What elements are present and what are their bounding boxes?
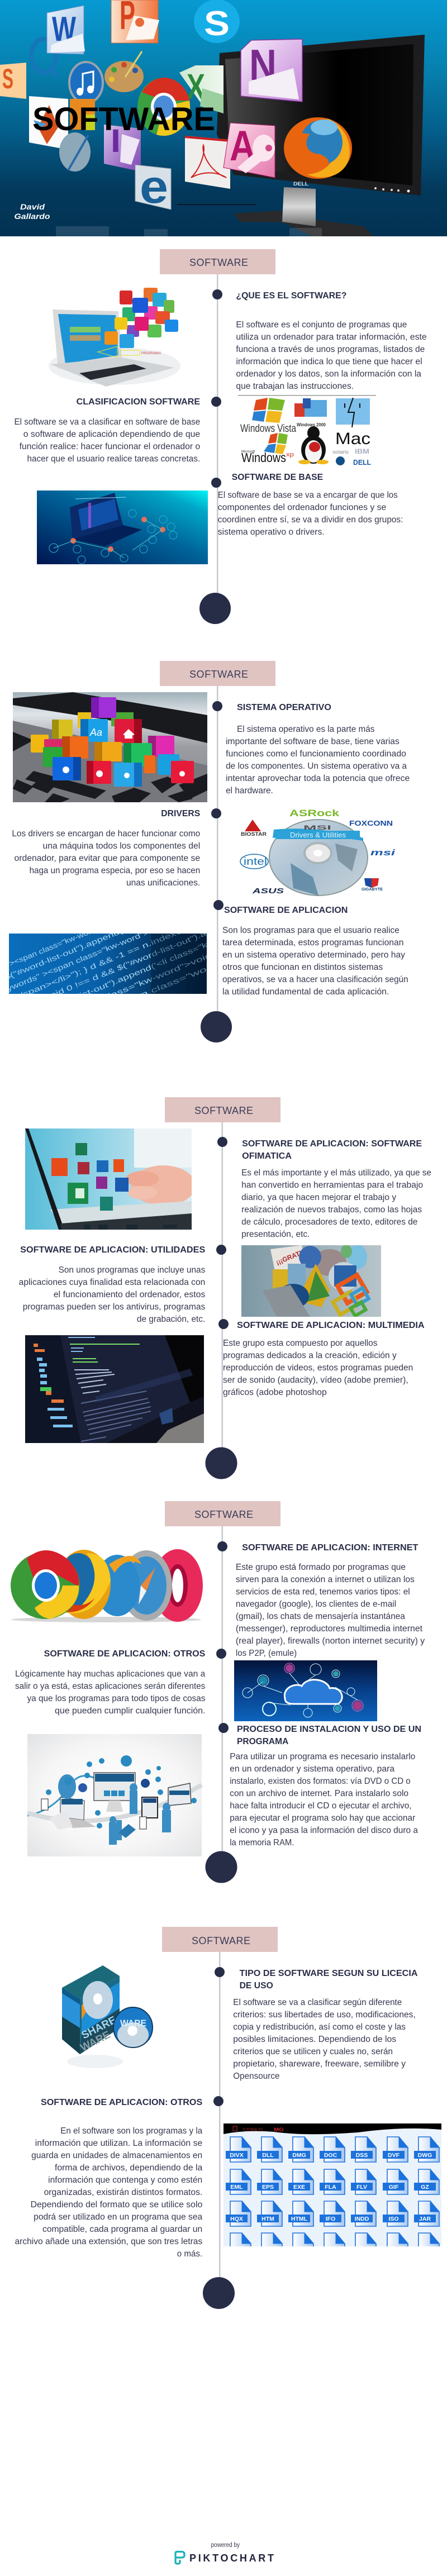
text block: software ofimatica: han convertido en herramientas para el trabajo bbox=[241, 1180, 423, 1190]
text block: software de aplicacion: operativos, se va a hacer una clasificación según bbox=[222, 975, 408, 984]
image: file format icons: DLL bbox=[262, 2152, 274, 2159]
heading: software de base: SOFTWARE DE BASE bbox=[232, 473, 323, 482]
icon: word: W bbox=[52, 10, 76, 49]
heading: software ofimatica: OFIMATICA bbox=[242, 1151, 292, 1161]
dot bbox=[212, 701, 222, 711]
icon: access bbox=[224, 122, 275, 178]
author name: Gallardo bbox=[15, 212, 50, 221]
panel: section 2 bbox=[0, 661, 410, 1049]
icon: infopath bbox=[104, 123, 141, 172]
text block: internet bbox=[236, 1563, 425, 1658]
icon: itunes bbox=[69, 62, 103, 103]
title: SOFTWARE bbox=[32, 101, 215, 137]
image: file format icons: HTM bbox=[261, 2216, 274, 2222]
image: drivers cd and brand logos: ASUS bbox=[251, 887, 284, 895]
image: operating system logos: IBM bbox=[355, 447, 369, 455]
heading: que es el software: ¿QUE ES EL SOFTWARE? bbox=[236, 291, 346, 301]
text block: que es el software bbox=[236, 320, 427, 391]
text block: proceso de instalacion: en un ordenador y sistema operativo, para bbox=[230, 1764, 394, 1774]
panel: header banner bbox=[0, 0, 447, 236]
dot bbox=[218, 1319, 229, 1329]
text block: software de base: El software de base se va a encargar de que los bbox=[218, 491, 398, 500]
text block: otros archivos: podrá ser utilizado en un programa que sea bbox=[34, 2212, 203, 2222]
icon: onenote bbox=[241, 39, 302, 102]
dot bbox=[213, 900, 224, 910]
image: drivers cd and brand logos: GIGABYTE bbox=[362, 888, 383, 892]
image: operating system logos: Windows bbox=[241, 450, 286, 465]
panel: section 1 bbox=[15, 249, 427, 624]
text block: sistema operativo: intentar aprovechar toda la potencia que ofrece bbox=[226, 774, 410, 783]
text block: proceso de instalacion: para ejecutar el programa solo hay que accionar bbox=[230, 1813, 415, 1823]
image: drivers cd and brand logos: msi bbox=[370, 848, 396, 858]
text block: otros archivos: guarda en unidades de almacenamientos en bbox=[31, 2151, 202, 2160]
image: file format icons: FLV bbox=[356, 2184, 367, 2191]
text block: sistema operativo: importante del software de base, tiene varias bbox=[226, 737, 400, 746]
section heading box bbox=[160, 661, 275, 686]
section heading box bbox=[165, 1501, 280, 1526]
text block: internet: navegador (google), los clientes de e-mail bbox=[236, 1599, 396, 1609]
text block: utilidades: Son unos programas que incluye unas bbox=[59, 1265, 206, 1275]
icon: quicktime bbox=[31, 39, 57, 75]
dot bbox=[212, 289, 222, 299]
image: web browser logos bbox=[11, 1549, 203, 1622]
text block: clasificacion: función realice: hacer funcionar el ordenador o bbox=[20, 442, 200, 451]
text block: software de base: componentes del ordenador funciones y se bbox=[218, 503, 386, 512]
text block: sistema operativo: El sistema operativo es la parte más bbox=[237, 725, 375, 734]
text block: software de base bbox=[218, 491, 403, 537]
dot bbox=[215, 1967, 225, 1977]
author name bbox=[15, 202, 50, 221]
text block: internet: los P2P, (emule) bbox=[236, 1649, 297, 1658]
heading: tipo de software bbox=[240, 1969, 418, 1991]
text block: internet: Este grupo está formado por programas que bbox=[236, 1563, 406, 1572]
icon: powerpoint bbox=[111, 0, 159, 43]
icon: small tiles bbox=[70, 99, 95, 130]
section heading box bbox=[165, 1097, 280, 1122]
heading: proceso de instalacion: PROGRAMA bbox=[237, 1737, 288, 1746]
text block: proceso de instalacion: con un archivo de internet. Para instalarlo solo bbox=[230, 1789, 408, 1798]
text block: otros: ya que los programas para todo tipos de cosas bbox=[27, 1694, 206, 1703]
image: file format icons: DMG bbox=[292, 2152, 306, 2159]
text block: software ofimatica bbox=[241, 1168, 431, 1239]
image: multimedia software collage: ¡¡¡GRATIS!!! bbox=[275, 1245, 313, 1266]
footer: powered by piktochart: powered by bbox=[211, 2542, 240, 2549]
heading: proceso de instalacion: PROCESO DE INSTALACION Y USO DE UN bbox=[237, 1725, 421, 1734]
heading: internet: SOFTWARE DE APLICACION: INTERNET bbox=[242, 1543, 419, 1553]
icon: sway: S bbox=[2, 63, 13, 94]
text block: clasificacion: hacer que el usuario realice tareas concretas. bbox=[27, 454, 200, 464]
image: file format icons: DVF bbox=[388, 2152, 400, 2159]
text block: multimedia: ser de sonido (audacity), vídeo (adobe premier), bbox=[223, 1375, 408, 1385]
image: drivers cd and brand logos: Drivers & Utilities bbox=[290, 831, 346, 839]
large end dot bbox=[199, 593, 231, 624]
text block: software de base: sistema operativo o drivers. bbox=[218, 527, 325, 537]
icon: infopath: I bbox=[111, 123, 121, 159]
image: shareware box: WARE bbox=[120, 2018, 146, 2029]
text block: drivers: Los drivers se encargan de hacer funcionar como bbox=[12, 829, 200, 839]
text block: internet: servicios de esta red, tenemos varios tipos: el bbox=[236, 1587, 410, 1597]
image: file format icons: DSS bbox=[356, 2152, 368, 2159]
text block: otros archivos: En el software son los programas y la bbox=[60, 2126, 203, 2136]
author name: David bbox=[20, 202, 45, 211]
text block: tipo de software: Opensource bbox=[233, 2072, 279, 2081]
text block: otros: salir o ya está, estas aplicaciones serán diferentes bbox=[15, 1682, 206, 1691]
image: operating system logos: Mac bbox=[335, 430, 370, 448]
text block: software de aplicacion: otros que funcionan en distintos sistemas bbox=[222, 963, 383, 972]
image: file format icons: INDD bbox=[355, 2216, 369, 2222]
image: operating system logos: Microsoft bbox=[241, 450, 255, 454]
image: file format icons: TUTORIALES bbox=[242, 2127, 263, 2132]
image: app cubes on keyboard bbox=[13, 692, 207, 802]
text block: otros archivos: forma de archivos, dependiendo de la bbox=[55, 2163, 203, 2173]
icon: firefox bbox=[284, 117, 352, 179]
text block: otros: Lógicamente hay muchas aplicaciones que van a bbox=[15, 1669, 206, 1679]
large end dot bbox=[206, 1851, 237, 1883]
icon: chrome bbox=[137, 78, 190, 136]
text block: multimedia: reproducción de videos, estos programas pueden bbox=[223, 1363, 413, 1373]
text block: sistema operativo bbox=[226, 725, 410, 796]
text block: otros archivos: archivo añade una extensión, que son tres letras bbox=[15, 2237, 202, 2246]
text block: tipo de software: propietario, shareware, freeware, semilibre y bbox=[233, 2059, 406, 2069]
text block: drivers: una máquina todos los componentes del bbox=[42, 841, 200, 851]
text block: tipo de software: copia y redistribución, así como el coste y las bbox=[233, 2022, 406, 2032]
icon: desktop monitor bbox=[217, 35, 425, 236]
image: file format icons: EML bbox=[230, 2184, 243, 2191]
footer: powered by piktochart bbox=[175, 2542, 274, 2564]
heading: software ofimatica: SOFTWARE DE APLICACION: SOFTWARE bbox=[242, 1139, 422, 1149]
text block: software de aplicacion bbox=[222, 926, 408, 997]
image: file format icons: DIVX bbox=[230, 2152, 244, 2159]
text block: proceso de instalacion bbox=[230, 1752, 418, 1848]
text block: drivers: unas unificaciones. bbox=[126, 878, 200, 888]
image: operating system logos: solaris bbox=[332, 449, 349, 455]
text block: proceso de instalacion: hace falta introducir el CD o ejecutar el archivo, bbox=[230, 1801, 412, 1811]
text block: internet: (gmail), los chats de mensajería instantánea bbox=[236, 1612, 405, 1621]
heading: clasificacion: CLASIFICACION SOFTWARE bbox=[77, 397, 200, 407]
image: operating system logos: Windows Vista bbox=[240, 423, 296, 435]
text block: multimedia: gráficos (adobe photoshop bbox=[223, 1388, 327, 1397]
text block: otros archivos: organizadas, existirán distintos formatos. bbox=[44, 2188, 202, 2197]
text block: internet: (real player), firewalls (norton internet security) y bbox=[236, 1636, 425, 1646]
image: drivers cd and brand logos: ASRock bbox=[289, 808, 340, 818]
heading: multimedia: SOFTWARE DE APLICACION: MULTIMEDIA bbox=[237, 1321, 425, 1330]
text block: otros archivos bbox=[15, 2126, 203, 2259]
dot bbox=[217, 1137, 227, 1147]
image: shareware box: SHARE bbox=[80, 2015, 118, 2041]
image: file format icons: GZ bbox=[421, 2184, 429, 2191]
image: drivers cd and brand logos: FOXCONN bbox=[349, 819, 393, 827]
large end dot bbox=[203, 2277, 235, 2309]
dot bbox=[213, 2096, 224, 2106]
text block: drivers: haga un programa especia, por eso se hacen bbox=[30, 866, 200, 875]
text block: otros bbox=[15, 1669, 206, 1716]
panel: section 5 bbox=[15, 1927, 441, 2309]
text block: que es el software: El software es el conjunto de programas que bbox=[236, 320, 407, 330]
image: operating system logos: Windows 2000 bbox=[297, 422, 326, 427]
image: file format icons: GIF bbox=[389, 2184, 399, 2191]
text block: sistema operativo: funciones como el funcionamiento coordinado bbox=[226, 749, 406, 759]
text block: internet: sirven para la conexión a internet o utilizan los bbox=[236, 1575, 415, 1584]
image: operating system logos: xp bbox=[286, 451, 294, 458]
image: office apps over laptop bbox=[25, 1129, 196, 1230]
icon: excel: X bbox=[187, 66, 205, 107]
text block: tipo de software: criterios que se utilicen y cuales no, serán bbox=[233, 2047, 393, 2056]
text block: tipo de software: El software se va a clasificar según diferente bbox=[233, 1998, 402, 2007]
image: blue code screen: d,c ? $("#word-list-out").append('<li class="kw-word" bbox=[8, 926, 245, 1028]
underline stroke bbox=[177, 204, 256, 205]
faded reflections bbox=[56, 226, 322, 236]
text block: drivers: ordenador, para evitar que para componente se bbox=[15, 854, 200, 863]
image: file format icons: HQX bbox=[230, 2216, 243, 2222]
dot bbox=[218, 1723, 229, 1733]
text block: sistema operativo: de los componentes. Un sistema operativo va a bbox=[226, 761, 407, 771]
section heading box: SOFTWARE bbox=[189, 257, 248, 268]
icon: sway bbox=[0, 63, 26, 99]
text block: utilidades: de grabación, etc. bbox=[137, 1315, 205, 1324]
text block: otros archivos: o más. bbox=[177, 2249, 202, 2259]
panel: section 4 bbox=[11, 1501, 425, 1883]
image: shareware box bbox=[62, 1965, 153, 2068]
image: drivers cd and brand logos bbox=[240, 808, 396, 896]
image: blue code screen: keyword" ><span class="kw-word">void 0, g++); bbox=[13, 934, 254, 1038]
icon: excel bbox=[179, 65, 224, 113]
heading: software de aplicacion: SOFTWARE DE APLICACION bbox=[224, 906, 348, 915]
image: blue code screen: + "</span></li>"); } d && -1 == n.indexOf(d.b) && bbox=[0, 910, 226, 1007]
heading: utilidades: SOFTWARE DE APLICACION: UTILIDADES bbox=[20, 1245, 205, 1255]
section heading box: SOFTWARE bbox=[194, 1509, 253, 1520]
dot bbox=[211, 397, 221, 407]
text block: proceso de instalacion: el icono y ya pasa la información del disco duro a bbox=[230, 1826, 418, 1835]
text block: tipo de software bbox=[233, 1998, 416, 2081]
image: laptop with app icons bbox=[49, 288, 180, 387]
icon: skype bbox=[194, 0, 240, 43]
text block: utilidades bbox=[19, 1265, 206, 1324]
icon: internet explorer bbox=[135, 164, 171, 210]
text block: tipo de software: criterios: sus libertades de uso, modificaciones, bbox=[233, 2010, 416, 2020]
image: cloud network bbox=[234, 1660, 377, 1721]
text block: software ofimatica: Es el más importante y el más utilizado, ya que se bbox=[241, 1168, 431, 1178]
heading: tipo de software: DE USO bbox=[240, 1981, 273, 1991]
text block: software de aplicacion: Son los programas para que el usuario realice bbox=[222, 926, 400, 935]
image: app cubes on keyboard: Aa bbox=[89, 727, 102, 738]
image: file format icons: IFO bbox=[326, 2216, 335, 2222]
section heading box: SOFTWARE bbox=[194, 1105, 253, 1116]
image: blue code screen bbox=[0, 870, 264, 1049]
image: isometric laptop circuit bbox=[37, 491, 208, 564]
image: operating system logos bbox=[238, 395, 376, 466]
text block: multimedia: programas dedicados a la creación, edición y bbox=[223, 1351, 397, 1360]
image: multimedia software collage bbox=[241, 1245, 381, 1317]
icon: desktop monitor: DELL bbox=[293, 181, 309, 187]
heading: tipo de software: TIPO DE SOFTWARE SEGUN SU LICECIA bbox=[240, 1969, 418, 1978]
text block: software de aplicacion: tarea determinada, estos programas funcionan bbox=[222, 938, 403, 947]
image: file format icons bbox=[224, 2123, 441, 2258]
text block: utilidades: aplicaciones cuya finalidad esta relacionada con bbox=[19, 1278, 205, 1287]
text block: software ofimatica: diario, ya que hacen mejorar el trabajo y bbox=[241, 1193, 396, 1202]
text block: software de aplicacion: la utilidad fundamental de cada aplicación. bbox=[222, 987, 389, 997]
text block: otros archivos: información que contenga y como estén bbox=[48, 2175, 202, 2185]
large end dot bbox=[206, 1447, 237, 1479]
icon: internet explorer: e bbox=[140, 160, 168, 213]
image: file format icons: EPS bbox=[262, 2184, 274, 2191]
text block: software de aplicacion: en un sistema operativo determinado, pero hay bbox=[222, 950, 405, 960]
icon: access: A bbox=[230, 122, 255, 170]
text block: que es el software: que trabajan las instrucciones. bbox=[236, 382, 354, 391]
image: dark code editor bbox=[25, 1335, 204, 1443]
text block: proceso de instalacion: instalarlo, existen dos formatos: vía DVD o CD o bbox=[230, 1777, 411, 1786]
image: operating system logos: DELL bbox=[353, 458, 371, 466]
text block: clasificacion: o software de aplicación dependiendo de que bbox=[23, 430, 200, 439]
icon: compass disc bbox=[59, 132, 91, 172]
text block: proceso de instalacion: Para utilizar un programa es necesario instalarlo bbox=[230, 1752, 415, 1761]
heading: sistema operativo: SISTEMA OPERATIVO bbox=[237, 703, 331, 712]
image: file format icons: EXE bbox=[293, 2184, 305, 2191]
panel: section 3 bbox=[19, 1097, 431, 1479]
image: file format icons: MG bbox=[274, 2127, 284, 2132]
text block: software de base: coordinen entre sí, se va a dividir en dos grupos: bbox=[218, 515, 403, 525]
section heading box: SOFTWARE bbox=[192, 1935, 250, 1946]
text block: software ofimatica: de cálculo, procesadores de texto, editores de bbox=[241, 1217, 417, 1227]
text block: drivers bbox=[12, 829, 200, 888]
text block: software ofimatica: realización de nuevos trabajos, como las hojas bbox=[241, 1205, 422, 1215]
image: file format icons: HTML bbox=[291, 2216, 308, 2222]
dot bbox=[211, 478, 221, 488]
text block: otros archivos: Dependiendo del formato que se utilice solo bbox=[31, 2200, 202, 2210]
text block: utilidades: programas pueden ser los antivirus, programas bbox=[23, 1302, 206, 1312]
image: blue code screen: list-out").append('<span class="word-list-out" bbox=[17, 942, 264, 1049]
text block: otros archivos: compatible, cada programa al guardar un bbox=[42, 2225, 202, 2234]
image: drivers cd and brand logos: intel bbox=[244, 856, 267, 867]
wordmark: PIKTOCHART bbox=[189, 2553, 274, 2564]
heading: otros archivos: SOFTWARE DE APLICACION: OTROS bbox=[41, 2098, 202, 2107]
image: file format icons: DWG bbox=[418, 2152, 432, 2159]
image: drivers cd and brand logos: BIOSTAR bbox=[241, 831, 267, 837]
text block: multimedia: Este grupo esta compuesto por aquellos bbox=[223, 1339, 378, 1348]
image: file format icons: FLA bbox=[325, 2184, 336, 2191]
text block: otros: que pueden cumplir cualquier función. bbox=[55, 1706, 205, 1716]
image: file format icons: DOC bbox=[324, 2152, 337, 2159]
heading: proceso de instalacion bbox=[237, 1725, 421, 1746]
image: file format icons: ISO bbox=[388, 2216, 399, 2222]
image: blue code screen: d = b[e], void 0 !== d && $("#word-list-out").append bbox=[4, 918, 235, 1017]
text block: clasificacion: El software se va a clasificar en software de base bbox=[15, 417, 200, 427]
image: connected devices bbox=[27, 1734, 202, 1856]
icon: word bbox=[47, 6, 85, 54]
text block: utilidades: el funcionamiento del ordenador, estos bbox=[54, 1290, 206, 1299]
text block: que es el software: ordenador y los datos, son la información con la bbox=[236, 369, 421, 379]
heading: drivers: DRIVERS bbox=[161, 809, 200, 818]
heading: otros: SOFTWARE DE APLICACION: OTROS bbox=[44, 1649, 205, 1659]
text block: tipo de software: posibles limitaciones. Dependiendo de los bbox=[233, 2035, 396, 2044]
text block: clasificacion bbox=[15, 417, 200, 464]
text block: otros archivos: información que utilizan. La información se bbox=[35, 2139, 202, 2148]
icon: onenote: N bbox=[249, 40, 277, 89]
heading: software ofimatica bbox=[242, 1139, 422, 1161]
text block: que es el software: funciona a través de unos programas, listados de bbox=[236, 345, 425, 354]
image: drivers cd and brand logos: MSI bbox=[303, 825, 331, 831]
icon: palette bbox=[104, 51, 144, 92]
text block: proceso de instalacion: la memoria RAM. bbox=[230, 1838, 294, 1848]
text block: software ofimatica: presentación, etc. bbox=[241, 1230, 310, 1239]
dot bbox=[216, 1649, 226, 1659]
image: file format icons: JAR bbox=[419, 2216, 431, 2222]
text block: multimedia bbox=[223, 1339, 413, 1397]
text block: internet: (messenger), reproductores multimedia internet bbox=[236, 1624, 423, 1634]
icon: piktochart logo bbox=[175, 2552, 184, 2564]
text block: que es el software: información que indica lo que tiene que hacer el bbox=[236, 357, 422, 366]
dot bbox=[216, 1245, 226, 1255]
section heading box bbox=[160, 249, 275, 274]
text block: sistema operativo: el hardware. bbox=[226, 786, 273, 796]
dot bbox=[217, 1541, 227, 1551]
dot bbox=[211, 808, 221, 818]
image: shareware box: WARE bbox=[79, 2029, 112, 2054]
section heading box bbox=[162, 1927, 278, 1952]
large end dot bbox=[201, 1011, 232, 1042]
image: blue code screen: keywords" ><span class="kw-word"> for (g = 0;g < f;) bbox=[0, 901, 217, 997]
section heading box: SOFTWARE bbox=[189, 669, 248, 680]
icon: skype: S bbox=[204, 4, 230, 43]
image: laptop with app icons: PROGRAMAS bbox=[141, 352, 161, 355]
icon: matlab bbox=[29, 96, 68, 150]
icon: adobe pdf bbox=[185, 136, 230, 189]
text block: que es el software: utiliza un ordenador para tratar información, este bbox=[236, 332, 427, 342]
